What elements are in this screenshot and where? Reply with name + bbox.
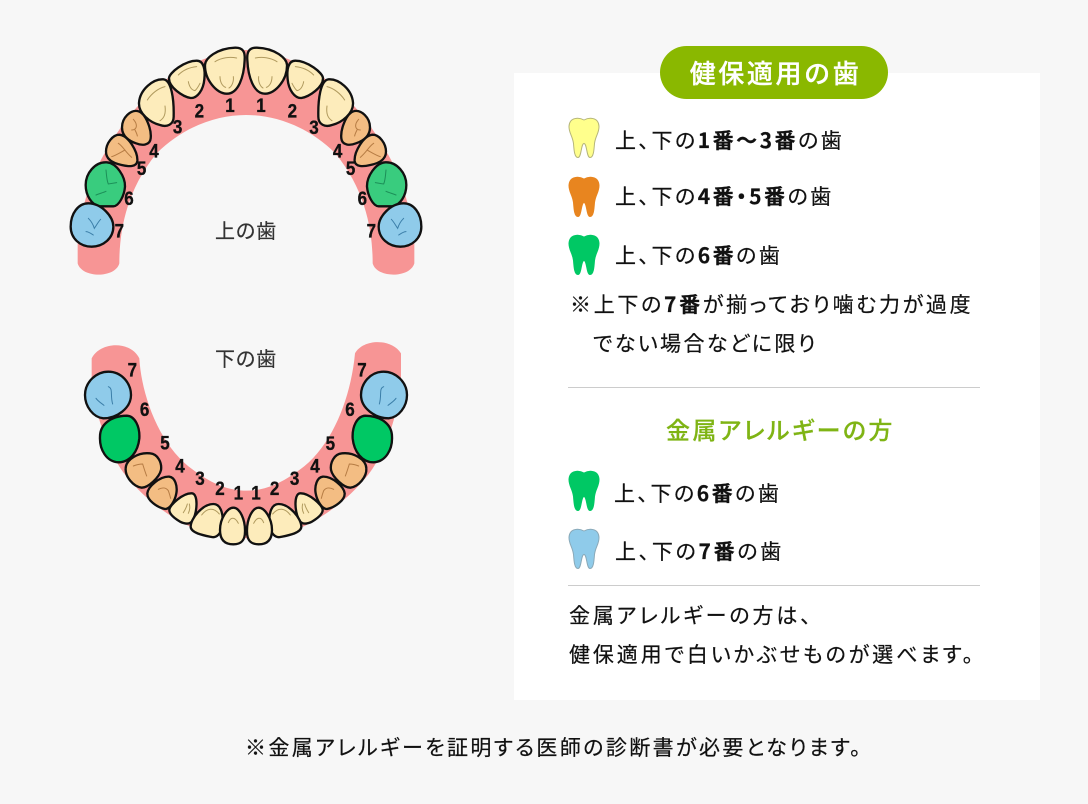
upper tooth numbers bbox=[115, 95, 376, 242]
lower tooth numbers: 1 bbox=[251, 482, 261, 504]
lower tooth numbers: 6 bbox=[140, 399, 149, 420]
heading: metal allergy: 金属アレルギーの方 bbox=[666, 411, 895, 446]
upper tooth numbers: 7 bbox=[367, 220, 376, 242]
note: condition line 2: でない場合などに限り bbox=[593, 328, 818, 358]
note: condition line 1: ※上下の7番が揃っており噛む力が過度 bbox=[570, 289, 973, 319]
lower tooth numbers: 7 bbox=[357, 360, 367, 381]
upper tooth numbers: 5 bbox=[346, 158, 355, 179]
icon: orange tooth bbox=[568, 176, 600, 217]
text: allergy explanation line 1: 金属アレルギーの方は、 bbox=[569, 600, 814, 630]
upper tooth numbers: 1 bbox=[256, 95, 266, 116]
upper tooth numbers: 3 bbox=[173, 116, 182, 138]
text: tooth 6: 上、下の6番の歯 bbox=[615, 240, 782, 270]
upper gum bbox=[78, 50, 414, 275]
upper tooth numbers: 6 bbox=[124, 188, 134, 209]
upper tooth numbers: 7 bbox=[115, 220, 124, 242]
lower tooth numbers: 4 bbox=[310, 455, 321, 477]
text: teeth 4 and 5: 上、下の4番・5番の歯 bbox=[615, 181, 834, 211]
lower gum bbox=[92, 342, 401, 538]
upper tooth numbers: 3 bbox=[309, 117, 319, 138]
upper tooth numbers: 6 bbox=[358, 188, 367, 209]
lower tooth numbers: 5 bbox=[326, 433, 335, 454]
divider bbox=[568, 387, 980, 388]
label: upper teeth: 上の歯 bbox=[215, 215, 277, 244]
upper tooth numbers: 5 bbox=[137, 158, 146, 179]
upper teeth right bbox=[247, 48, 421, 247]
text: teeth 1 to 3: 上、下の1番〜3番の歯 bbox=[615, 125, 844, 155]
text: tooth 6, allergy section: 上、下の6番の歯 bbox=[614, 478, 781, 508]
text: allergy explanation line 2: 健保適用で白いかぶせものが選べます。 bbox=[569, 639, 976, 669]
text: tooth 7: 上、下の7番の歯 bbox=[615, 536, 784, 566]
upper tooth numbers: 2 bbox=[288, 101, 297, 122]
upper tooth numbers: 2 bbox=[195, 101, 204, 122]
lower tooth numbers: 1 bbox=[234, 482, 243, 504]
lower tooth numbers: 3 bbox=[195, 468, 205, 489]
upper tooth numbers: 4 bbox=[333, 140, 343, 162]
lower tooth numbers: 6 bbox=[345, 399, 355, 420]
lower tooth numbers: 2 bbox=[270, 478, 279, 499]
icon: green tooth bbox=[568, 234, 600, 275]
lower tooth numbers: 4 bbox=[175, 455, 186, 477]
lower tooth numbers: 2 bbox=[215, 478, 225, 499]
upper teeth left bbox=[71, 48, 245, 247]
icon: blue tooth bbox=[568, 528, 600, 569]
lower tooth numbers: 5 bbox=[160, 432, 170, 454]
heading pill: insurance-covered teeth bbox=[660, 46, 888, 99]
upper tooth numbers: 4 bbox=[149, 140, 160, 162]
chart: upper dental arch bbox=[70, 46, 422, 275]
lower tooth numbers bbox=[128, 360, 367, 504]
panel: white legend card bbox=[514, 73, 1040, 700]
footnote: ※金属アレルギーを証明する医師の診断書が必要となります。 bbox=[245, 732, 863, 762]
divider bbox=[568, 585, 980, 586]
lower tooth numbers: 3 bbox=[290, 468, 299, 489]
upper tooth numbers: 1 bbox=[225, 95, 235, 116]
heading pill: insurance-covered teeth: 健保適用の歯 bbox=[690, 54, 861, 91]
icon: yellow tooth bbox=[568, 118, 600, 158]
chart: lower dental arch bbox=[84, 342, 408, 546]
lower teeth right bbox=[247, 372, 407, 544]
lower teeth left bbox=[85, 372, 245, 544]
icon: green tooth, allergy section bbox=[568, 470, 600, 511]
label: lower teeth: 下の歯 bbox=[215, 343, 277, 372]
lower tooth numbers: 7 bbox=[128, 360, 137, 381]
